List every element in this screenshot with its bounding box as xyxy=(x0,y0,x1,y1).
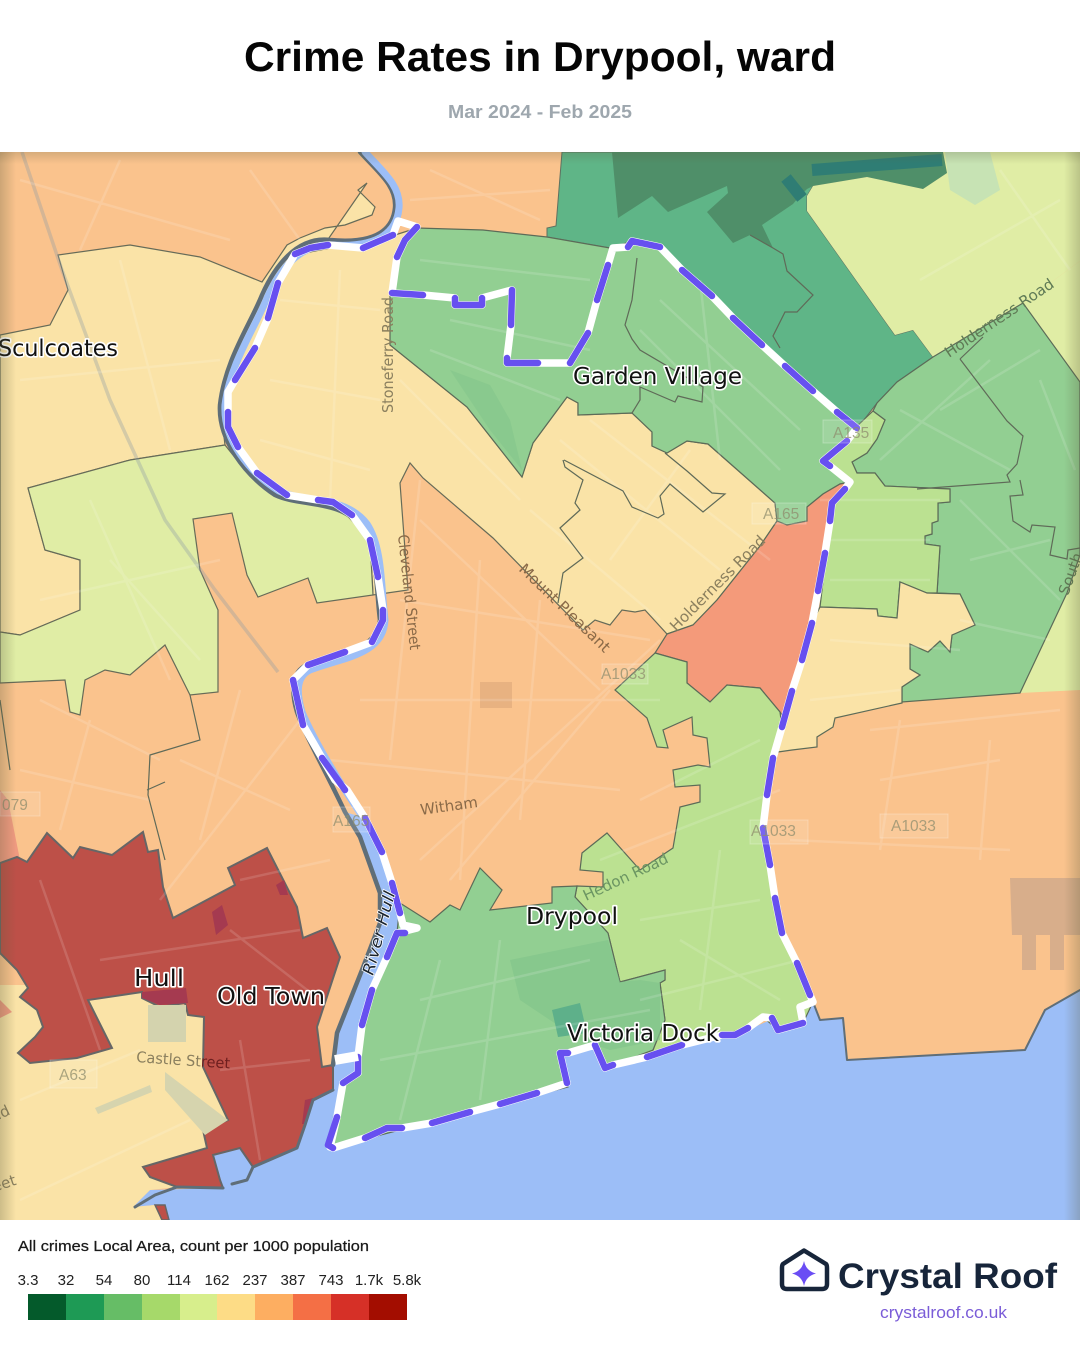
ward: south-east edge yellow-green xyxy=(1020,555,1080,693)
Mount Pleasant: Mount Pleasant xyxy=(515,560,614,656)
east peach coast xyxy=(813,990,1080,1060)
A165 label: A165 xyxy=(763,506,799,523)
legend values: 32 xyxy=(58,1272,74,1289)
small red piece at coast xyxy=(155,1205,169,1220)
Cleveland Street: Cleveland Street xyxy=(394,534,424,651)
legend values: 1.7k xyxy=(355,1272,384,1289)
Castle Street: Castle Street xyxy=(136,1048,231,1073)
legend values: 5.8k xyxy=(393,1272,422,1289)
A1033 label: A1033 xyxy=(601,666,646,683)
faint roads xyxy=(20,160,1075,1200)
park pond xyxy=(945,152,1000,205)
ward: lower-left cream xyxy=(0,985,228,1220)
ward: north centre cream xyxy=(222,228,777,634)
A1079 label: 079 xyxy=(2,797,28,814)
legend values: 162 xyxy=(204,1272,230,1289)
map edge shading xyxy=(0,152,1080,1220)
old town waterfront xyxy=(135,1090,333,1207)
Sculcoates: Sculcoates xyxy=(0,336,118,362)
green shading patches xyxy=(510,940,660,1050)
legend values: 237 xyxy=(242,1272,268,1289)
A135 label: A135 xyxy=(833,425,869,442)
Holderness Road south: Holderness Road xyxy=(666,532,769,635)
ward: east green xyxy=(852,303,1080,702)
ward: dark green park xyxy=(612,152,947,248)
inner ward boundaries xyxy=(0,235,1080,860)
logo wordmark: Crystal Roof xyxy=(838,1257,1057,1296)
legend values: 3.3 xyxy=(18,1272,38,1289)
ward: Garden Village green xyxy=(390,228,855,525)
Old Town: Old Town xyxy=(217,984,325,1010)
ward: Victoria Dock green xyxy=(330,868,665,1148)
Witham: Witham xyxy=(419,793,479,819)
Hull: Hull xyxy=(134,966,184,992)
choropleth map xyxy=(0,152,1080,1220)
legend values xyxy=(18,1272,422,1289)
Crystal Roof logo xyxy=(782,1250,1057,1322)
legend colour bar xyxy=(28,1294,407,1320)
Stoneferry Road: Stoneferry Road xyxy=(379,297,397,413)
legend values: 54 xyxy=(96,1272,112,1289)
dock building xyxy=(1010,878,1080,970)
ward: light green west xyxy=(0,445,373,715)
Hedon Road: Hedon Road xyxy=(580,849,671,905)
ward: Drypool east light green xyxy=(575,653,813,1068)
tan patch Witham xyxy=(480,682,512,708)
Victoria Dock: Victoria Dock xyxy=(567,1021,720,1047)
subtitle: date range: Mar 2024 - Feb 2025 xyxy=(448,101,632,122)
legend xyxy=(18,1239,422,1320)
A165 west label: A165 xyxy=(333,813,369,830)
grey land-use patches xyxy=(148,1005,186,1042)
title: Crime Rates in Drypool, ward xyxy=(244,33,836,80)
boundary purple dashes xyxy=(228,227,857,1148)
legend values: 114 xyxy=(167,1272,191,1289)
boundary white casing xyxy=(228,221,857,1148)
River Hull: River Hull xyxy=(359,888,399,977)
green shading patch xyxy=(450,370,522,470)
river Hull dark bank xyxy=(220,152,395,1065)
ward: salmon Holderness xyxy=(655,482,850,715)
road badges xyxy=(0,420,948,1088)
ward: north green xyxy=(547,152,947,428)
ward: east edge yellow-green xyxy=(1023,261,1080,382)
ward: light green around A165 junction xyxy=(820,411,950,618)
website url: crystalroof.co.uk xyxy=(880,1304,1008,1322)
railway line xyxy=(22,152,278,672)
Drypool ward boundary xyxy=(228,221,857,1148)
street name labels xyxy=(0,275,1080,1196)
water: teal ponds xyxy=(786,160,942,198)
A1033 east label: A1033 xyxy=(891,818,936,835)
legend title: All crimes Local Area, count per 1000 population xyxy=(18,1239,369,1255)
ward: north-east light yellow-green xyxy=(807,152,1080,357)
A63 label: A63 xyxy=(59,1067,87,1084)
river Hull water xyxy=(225,152,399,813)
legend values: 743 xyxy=(318,1272,344,1289)
ward: cream east xyxy=(778,582,975,752)
ward: salmon strips at left edge xyxy=(0,790,20,1018)
river edge lines xyxy=(135,152,1080,1207)
ward: red Hull city centre and Old Town xyxy=(0,832,340,1188)
icon: house with star xyxy=(782,1250,827,1289)
legend values: 387 xyxy=(280,1272,306,1289)
bridge strip xyxy=(335,1056,358,1060)
legend values: 80 xyxy=(134,1272,150,1289)
A1033 boundary label: A1033 xyxy=(751,823,796,840)
road number labels xyxy=(0,420,948,1088)
Drypool: Drypool xyxy=(526,904,618,930)
dark red blocks xyxy=(142,880,313,1124)
water: Humber and River Hull xyxy=(133,812,1080,1220)
Garden Village: Garden Village xyxy=(573,364,742,390)
Holderness Road north: Holderness Road xyxy=(941,275,1057,361)
marina xyxy=(95,1072,228,1135)
ward: Sculcoates cream xyxy=(0,183,375,635)
place labels xyxy=(0,336,742,1047)
teal square xyxy=(552,1003,587,1037)
